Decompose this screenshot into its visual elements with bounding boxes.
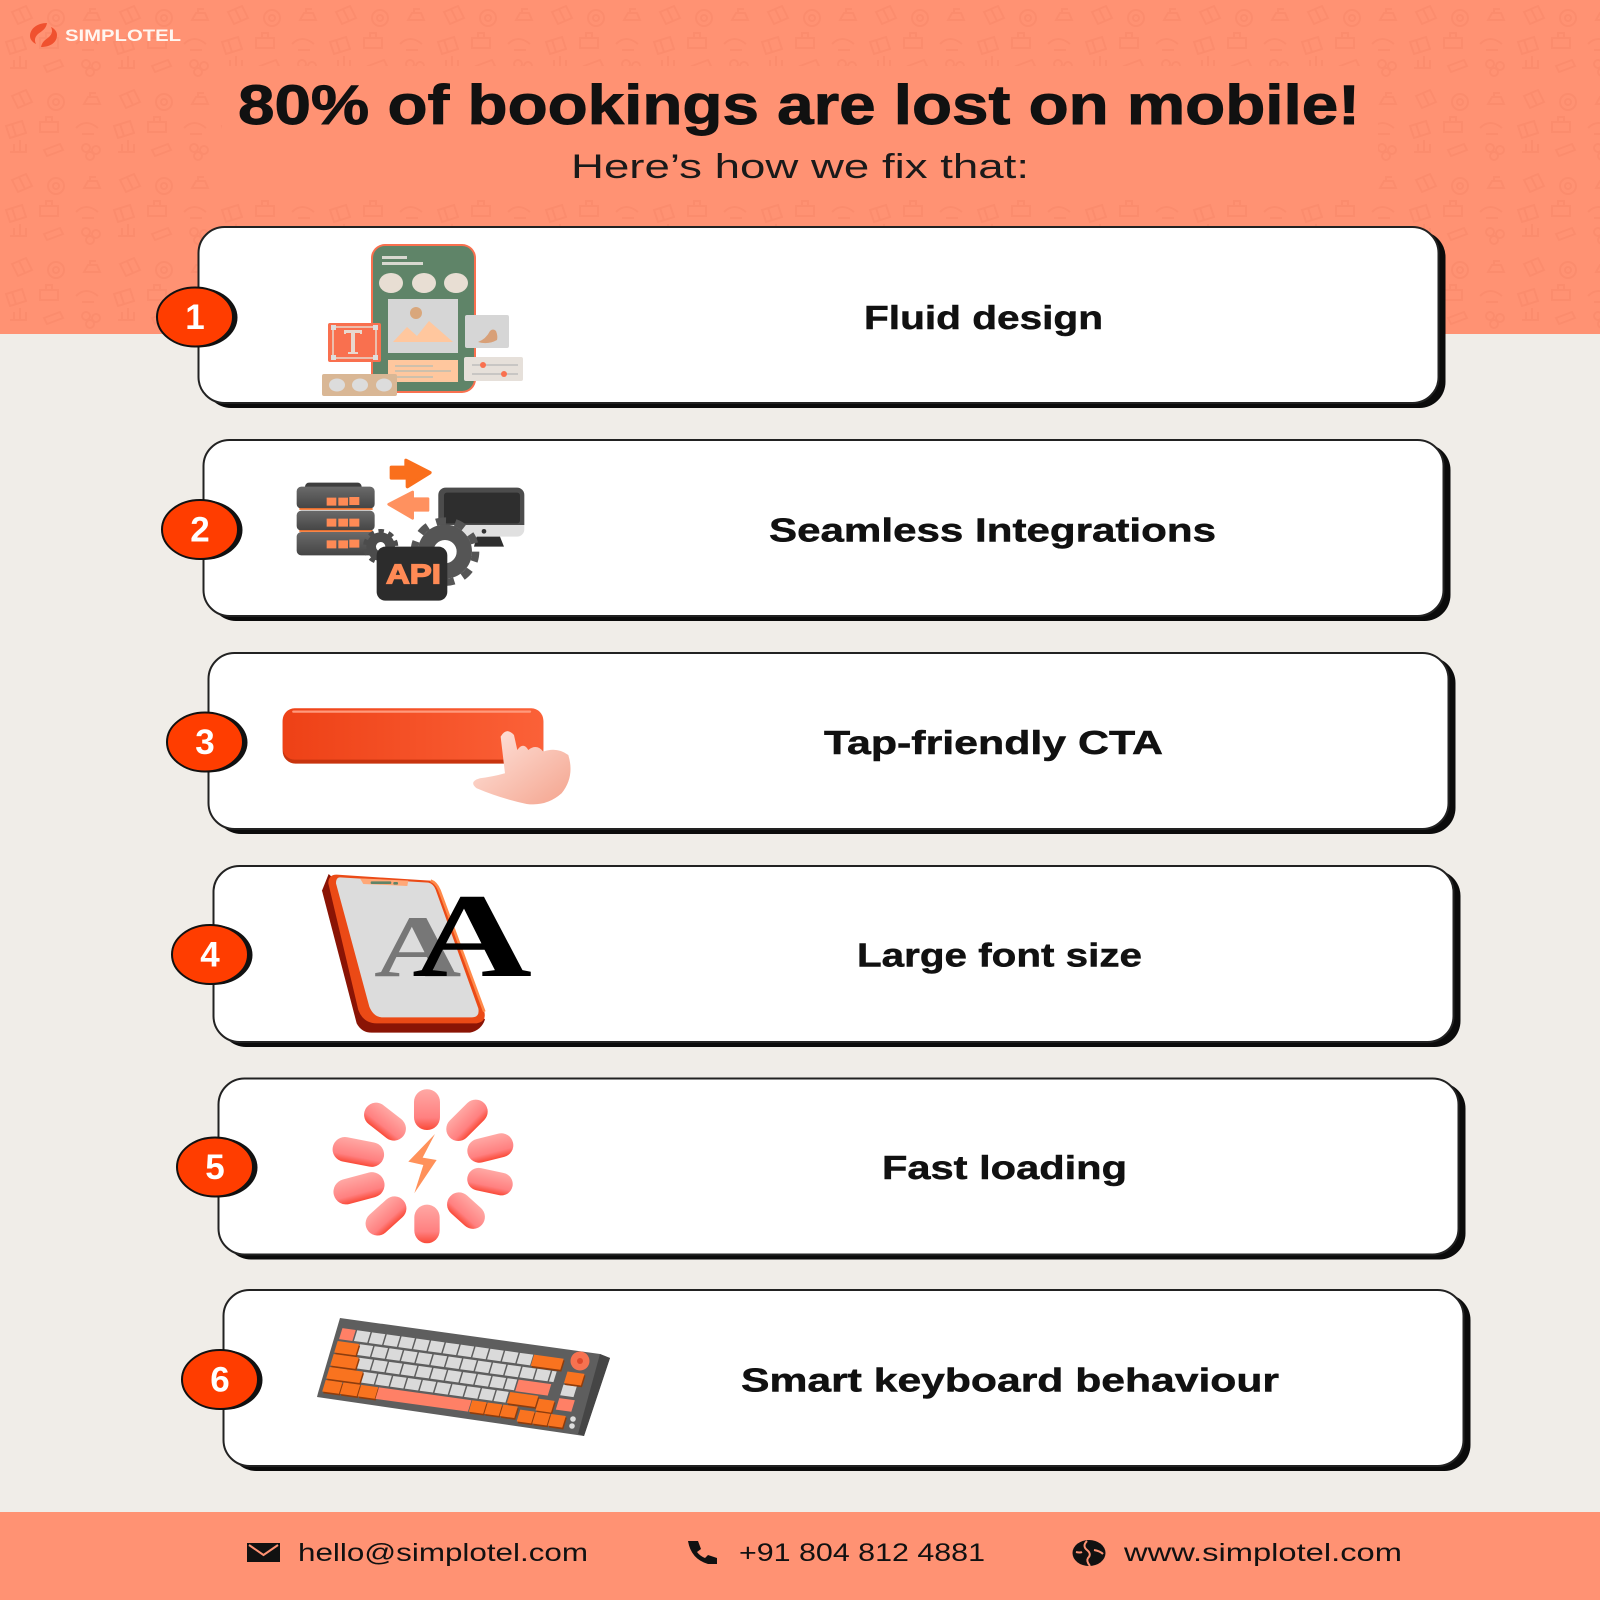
card bbox=[214, 866, 1460, 1047]
label: Smart keyboard behaviour bbox=[741, 1362, 1279, 1398]
panel: step 3 tap-friendly cta bbox=[167, 653, 1456, 834]
number badge bbox=[167, 712, 248, 772]
icon: globe bbox=[1072, 1540, 1106, 1566]
label: Tap-friendly CTA bbox=[824, 724, 1163, 761]
icon: keyboard bbox=[317, 1318, 610, 1436]
icon: phone with large letters bbox=[322, 869, 532, 1033]
logo bbox=[30, 23, 181, 47]
number badge bbox=[177, 1138, 258, 1198]
contact: email bbox=[247, 1539, 588, 1567]
subtitle: Here’s how we fix that: bbox=[571, 148, 1029, 186]
contact: website bbox=[1072, 1539, 1402, 1567]
label: Fast loading bbox=[882, 1149, 1127, 1186]
card bbox=[208, 653, 1456, 834]
panel: step 5 fast loading bbox=[177, 1078, 1466, 1260]
header band bbox=[0, 0, 1600, 334]
panel: step 1 fluid design bbox=[157, 227, 1446, 408]
number badge bbox=[172, 925, 252, 985]
number badge bbox=[182, 1350, 262, 1410]
icon: envelope bbox=[247, 1543, 280, 1562]
number badge: 1 bbox=[185, 298, 205, 337]
phone number: +91 804 812 4881 bbox=[739, 1539, 985, 1567]
label: Seamless Integrations bbox=[769, 512, 1216, 548]
card bbox=[218, 1078, 1466, 1260]
card bbox=[204, 440, 1450, 621]
number badge bbox=[157, 288, 238, 348]
panel: step 6 smart keyboard behaviour bbox=[182, 1290, 1470, 1471]
icon: api integration: API bbox=[386, 558, 441, 589]
footer band bbox=[0, 1512, 1600, 1600]
label: Large font size bbox=[857, 936, 1142, 974]
icon: logo swirl bbox=[30, 23, 57, 47]
number badge: 3 bbox=[195, 723, 215, 762]
number badge: 4 bbox=[200, 936, 220, 974]
website address: www.simplotel.com bbox=[1123, 1539, 1402, 1567]
number badge: 2 bbox=[190, 510, 210, 550]
panel: step 2 seamless integrations bbox=[162, 440, 1450, 621]
card bbox=[224, 1290, 1470, 1471]
panel: step 4 large font size bbox=[172, 866, 1460, 1047]
icon: responsive phone ui bbox=[322, 244, 523, 396]
card bbox=[198, 227, 1446, 408]
icon: api integration bbox=[297, 460, 524, 601]
title: 80% of bookings are lost on mobile! bbox=[238, 73, 1360, 136]
label: Fluid design bbox=[864, 299, 1103, 336]
icon: phone handset bbox=[688, 1541, 717, 1564]
number badge bbox=[162, 500, 242, 560]
icon: phone with large letters: A bbox=[412, 869, 532, 1002]
icon: button with tapping hand bbox=[283, 708, 571, 804]
number badge: 6 bbox=[210, 1360, 230, 1400]
brand name: SIMPLOTEL bbox=[65, 26, 181, 45]
contact: phone bbox=[688, 1539, 985, 1567]
number badge: 5 bbox=[205, 1148, 225, 1187]
icon: loading spinner with bolt bbox=[330, 1089, 516, 1243]
email address: hello@simplotel.com bbox=[298, 1539, 588, 1567]
icon: phone with large letters: A bbox=[374, 898, 461, 995]
